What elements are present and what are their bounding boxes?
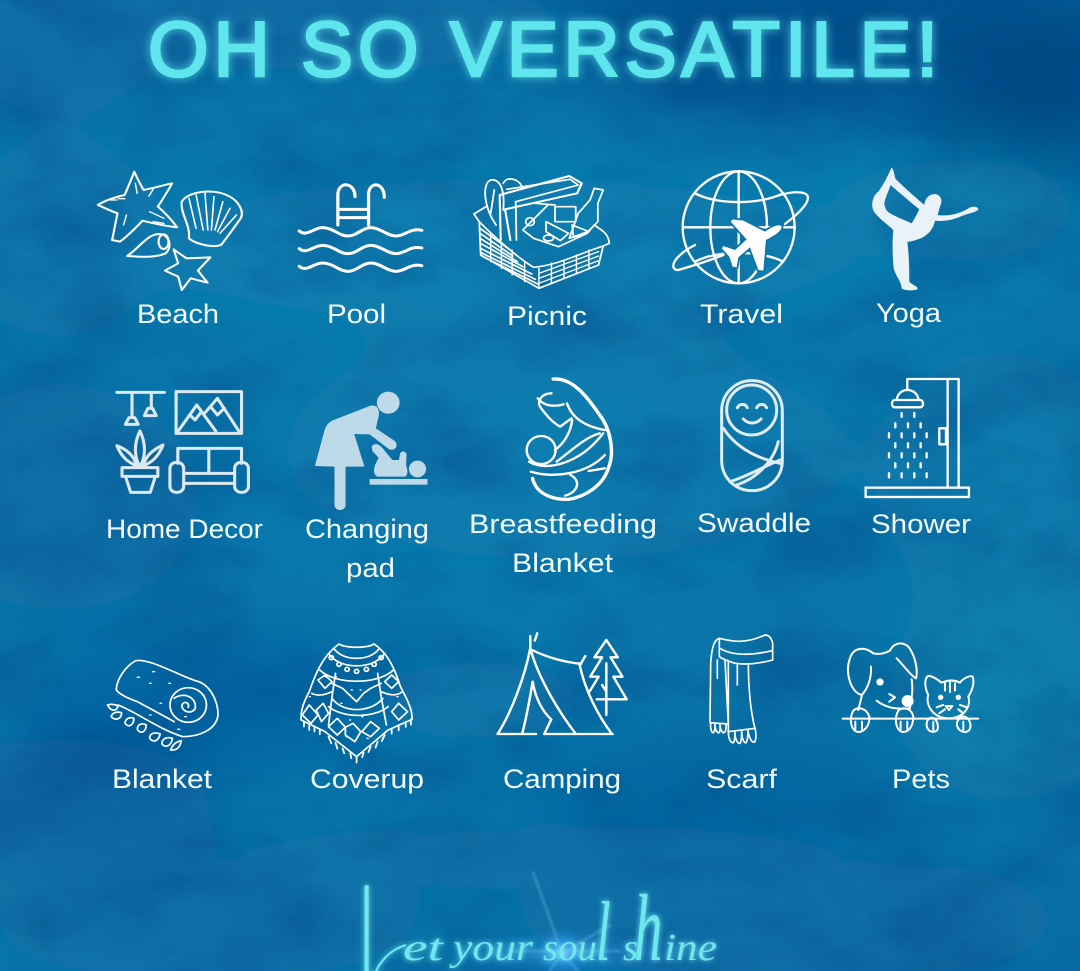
- label: Breastfeeding Blanket: Blanket: [512, 548, 614, 578]
- item: Beach: [98, 172, 242, 329]
- label: Shower: Shower: [871, 509, 971, 539]
- item: Picnic: [474, 176, 609, 331]
- icon: mother nursing baby: [527, 379, 611, 499]
- label: Camping: Camping: [503, 764, 621, 794]
- label: Yoga: Yoga: [876, 298, 942, 328]
- footer: tagline script: [361, 854, 717, 971]
- label: Changing pad: [305, 514, 429, 583]
- footer: tagline script: sou: [543, 927, 597, 969]
- label: Picnic: Picnic: [507, 301, 587, 331]
- icon: rolled blanket: [108, 660, 218, 750]
- icon: home decor room items: [117, 392, 248, 492]
- item: Scarf: [706, 635, 778, 794]
- icon: tent and pine tree: [498, 633, 627, 734]
- footer: tagline script: your: [448, 927, 533, 969]
- label: Swaddle: Swaddle: [697, 508, 811, 538]
- item: Camping: [498, 633, 627, 794]
- icon: pool ladder and waves: [299, 185, 422, 271]
- item: Swaddle: [697, 381, 811, 538]
- item: Travel: [673, 171, 808, 329]
- icon: globe and plane: [673, 171, 808, 283]
- label: Pets: Pets: [892, 764, 950, 794]
- label: Blanket: Blanket: [112, 764, 213, 794]
- icon: scarf: [710, 635, 773, 743]
- item: Pets: [843, 643, 978, 794]
- label: Coverup: Coverup: [310, 764, 424, 794]
- label: Pool: Pool: [327, 299, 386, 329]
- label: Changing pad: pad: [346, 553, 395, 583]
- label: Scarf: Scarf: [706, 764, 778, 794]
- footer: tagline script: ine: [664, 927, 717, 969]
- icon part: plane: [722, 219, 782, 271]
- item: Coverup: [301, 644, 424, 794]
- item: Yoga: [872, 167, 978, 328]
- icon: parent changing baby: [315, 392, 428, 510]
- item: Changing pad: [305, 392, 429, 583]
- label: Changing pad: Changing: [305, 514, 429, 544]
- title: OH SO VERSATILE!: [148, 5, 938, 93]
- item: Breastfeeding Blanket: [469, 379, 657, 578]
- item: Home Decor: [106, 392, 263, 544]
- footer: starburst glow: [442, 872, 682, 971]
- label: Breastfeeding Blanket: Breastfeeding: [469, 509, 657, 539]
- icon: patterned poncho: [301, 644, 412, 763]
- label: Breastfeeding Blanket: [469, 509, 657, 578]
- footer: tagline script: s: [623, 927, 638, 969]
- icon: picnic basket: [474, 176, 609, 288]
- icon: starfish and shells: [98, 172, 242, 290]
- label: Home Decor: Home Decor: [106, 514, 263, 544]
- label: Travel: Travel: [700, 299, 783, 329]
- label: Beach: Beach: [137, 299, 219, 329]
- icon: yoga dancer pose: [872, 167, 978, 290]
- item: Pool: [299, 185, 422, 329]
- icon: shower stall: [866, 379, 969, 497]
- footer: tagline script: et: [403, 927, 445, 969]
- icon: dog and cat peeking over ledge: [843, 643, 978, 732]
- icon: swaddled baby: [722, 381, 782, 491]
- item: Blanket: [108, 660, 218, 794]
- item: Shower: [866, 379, 971, 539]
